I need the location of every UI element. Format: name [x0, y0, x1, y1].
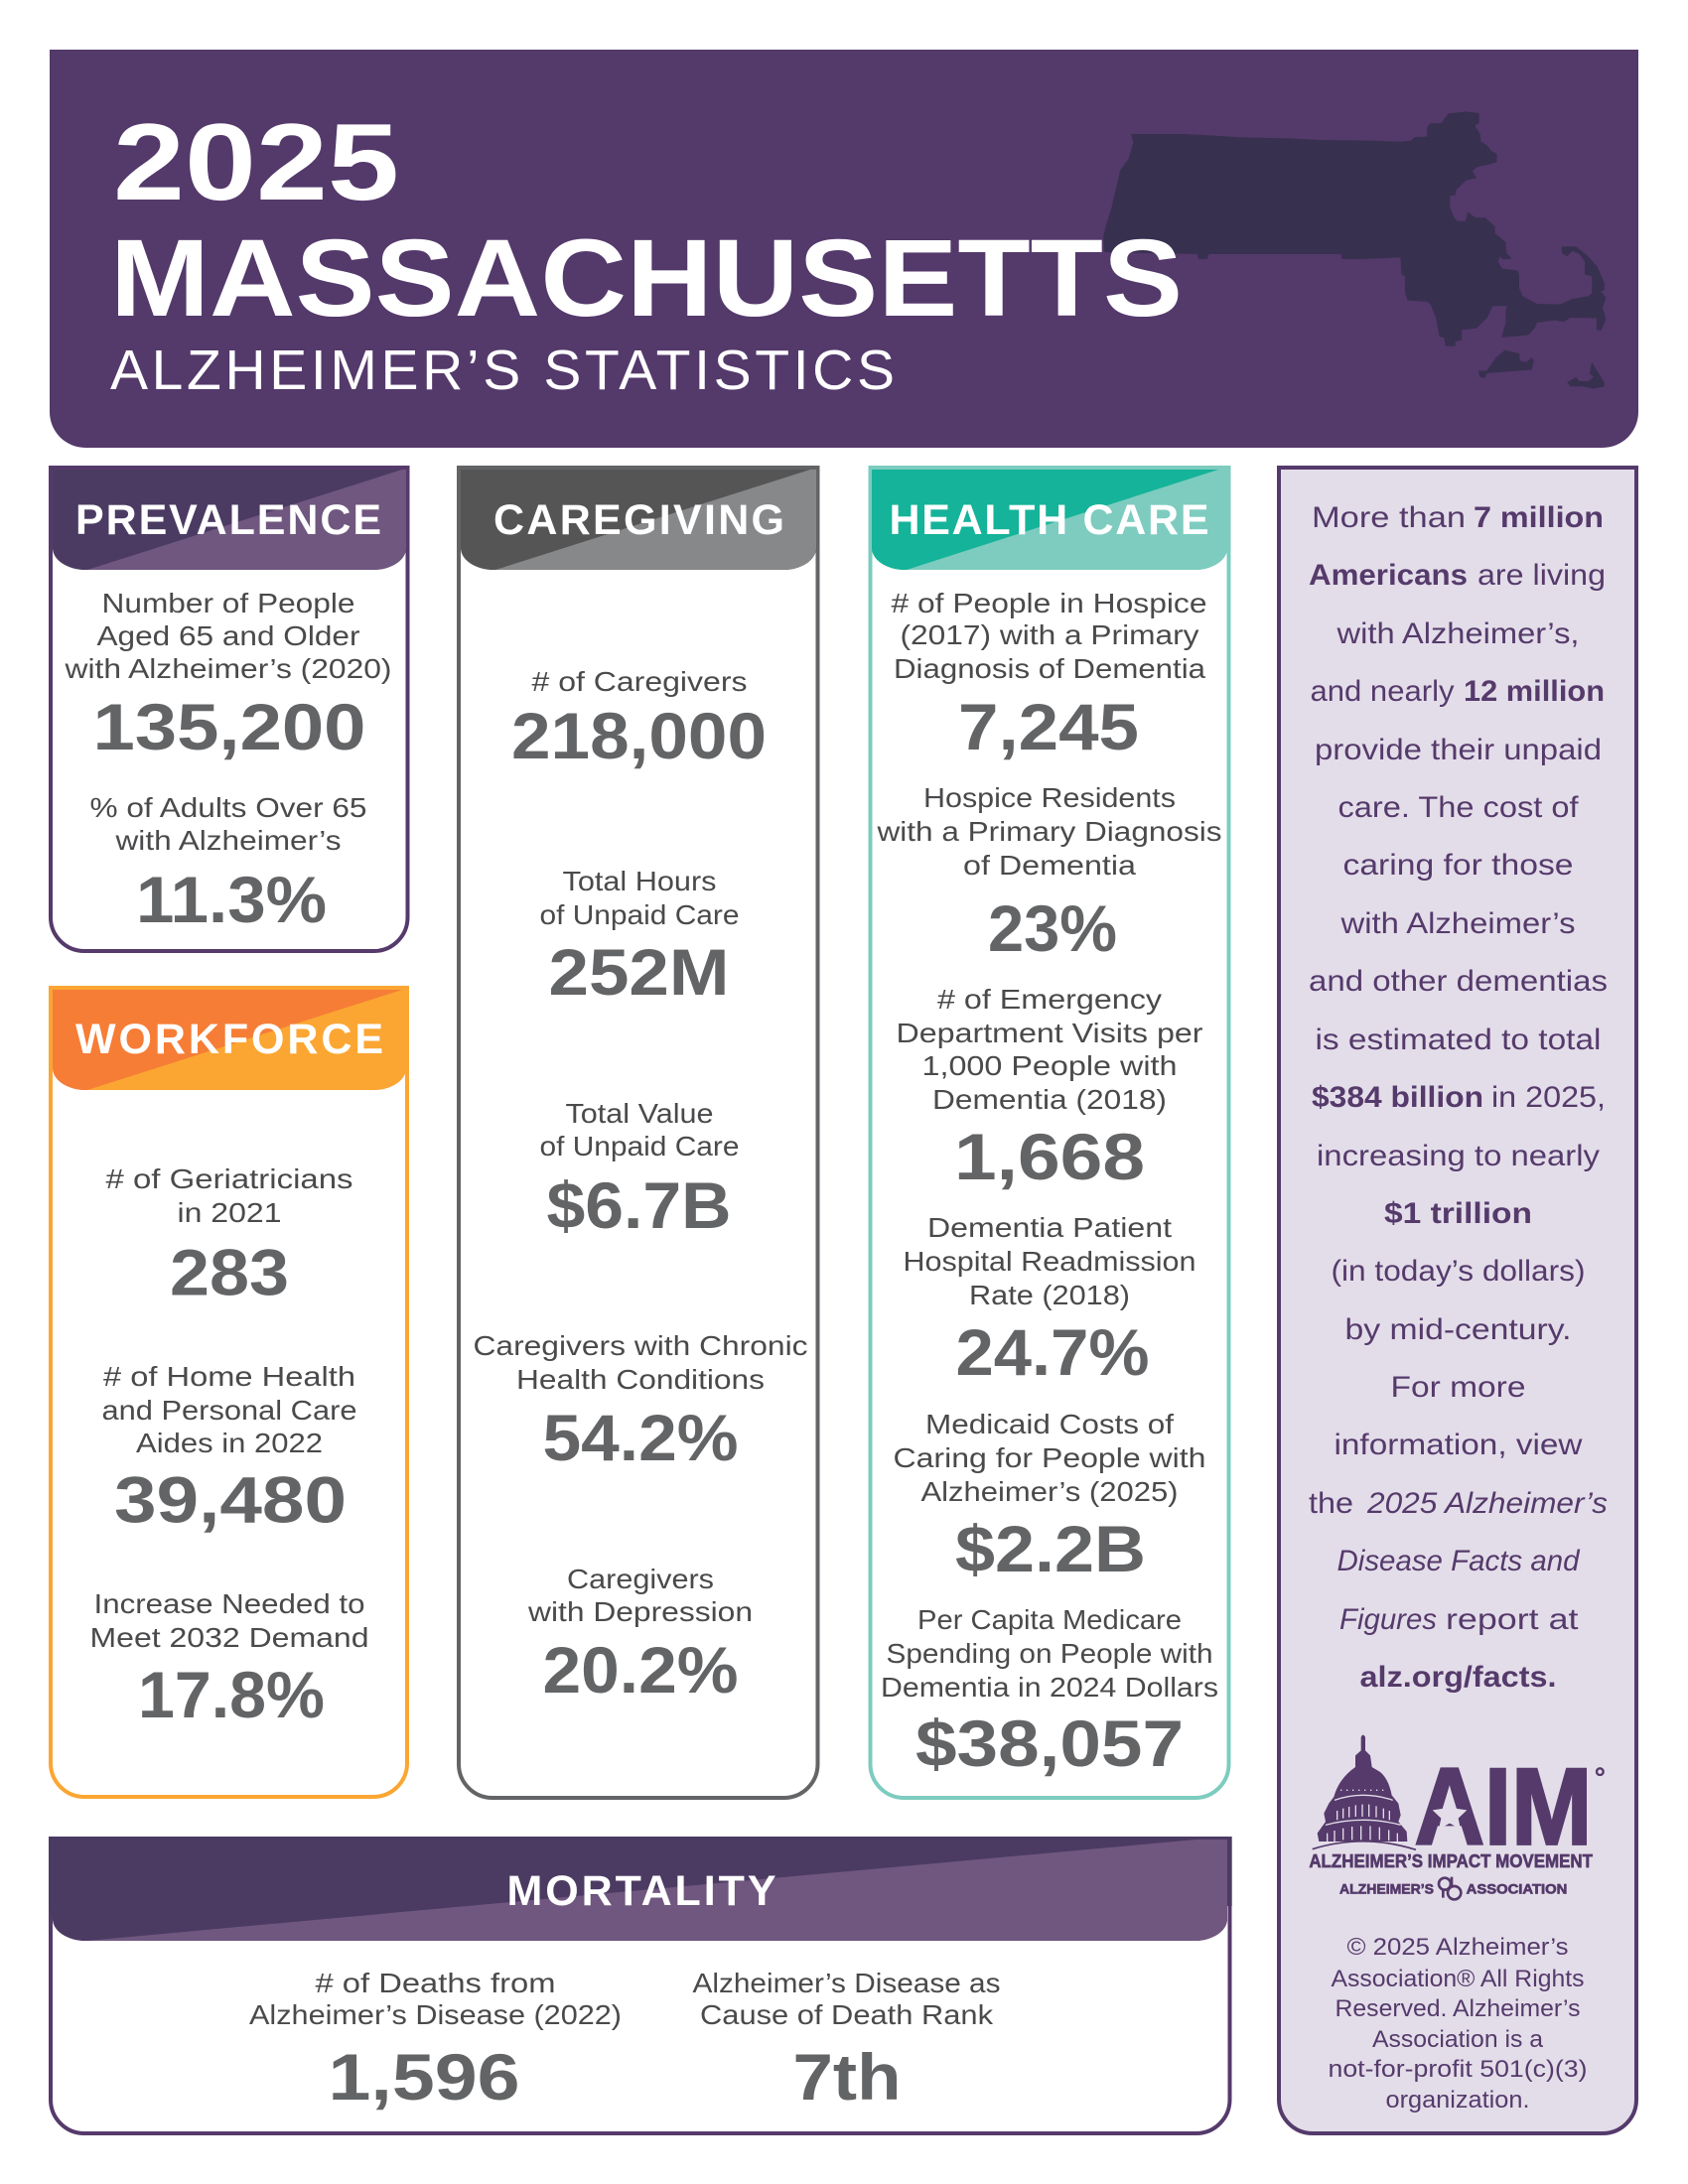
logo association: ALZHEIMER’S	[1339, 1881, 1434, 1897]
stat: hours of unpaid care: of Unpaid Care	[540, 899, 739, 930]
heading: mortality: MORTALITY	[506, 1867, 776, 1915]
stat: death rank: Cause of Death Rank	[700, 1999, 994, 2030]
stat: emergency visits	[896, 984, 1203, 1193]
stat: home health aides: 39,480	[114, 1463, 347, 1537]
sidebar paragraph: 12 million	[1464, 675, 1605, 708]
sidebar paragraph: caring for those	[1342, 849, 1573, 882]
stat: percent of adults	[89, 792, 367, 936]
stat: geriatricians: in 2021	[177, 1197, 282, 1228]
sidebar paragraph: is estimated to total	[1315, 1024, 1601, 1056]
stat: emergency visits: 1,668	[954, 1120, 1145, 1193]
sidebar paragraph: For more	[1390, 1371, 1525, 1404]
header banner	[50, 50, 1638, 448]
sidebar paragraph: information, view	[1335, 1429, 1583, 1461]
heading: caregiving: CAREGIVING	[493, 496, 784, 544]
subtitle: ALZHEIMER’S STATISTICS	[110, 339, 895, 402]
sidebar paragraph: increasing to nearly	[1317, 1140, 1600, 1172]
stat: chronic conditions: Caregivers with Chronic	[473, 1330, 808, 1361]
heading: health care: HEALTH CARE	[890, 496, 1209, 544]
stat: hospice residents	[876, 782, 1221, 965]
logo: AIM	[1309, 1735, 1604, 1899]
stat: medicaid	[894, 1409, 1205, 1585]
stat: medicaid: Medicaid Costs of	[925, 1409, 1174, 1439]
stat: value of unpaid care: Total Value	[566, 1098, 713, 1129]
sidebar paragraph: and nearly	[1311, 675, 1454, 708]
sidebar paragraph: the	[1309, 1487, 1353, 1520]
stat: value of unpaid care: of Unpaid Care	[540, 1131, 739, 1161]
logo wordmark: AIM	[1415, 1747, 1592, 1868]
panel: prevalence	[51, 468, 407, 951]
title	[110, 101, 1183, 340]
stat: people with Alzheimer's: with Alzheimer’s (2020)	[64, 653, 392, 684]
stat: home health aides: and Personal Care	[101, 1395, 357, 1426]
stat: depression	[527, 1564, 753, 1706]
stat: percent of adults: 11.3%	[136, 863, 327, 936]
sidebar paragraph: More than	[1312, 501, 1466, 534]
stat: value of unpaid care: $6.7B	[546, 1168, 731, 1242]
sidebar paragraph: $1 trillion	[1384, 1197, 1532, 1230]
stat: value of unpaid care	[540, 1098, 739, 1242]
stat: readmission: 24.7%	[955, 1315, 1150, 1389]
copyright note: Association is a	[1372, 2026, 1544, 2053]
stat: readmission: Rate (2018)	[969, 1280, 1130, 1310]
stat: caregivers: # of Caregivers	[532, 666, 747, 697]
icon: star	[1433, 1797, 1467, 1830]
stat: hospice residents: with a Primary Diagnosis	[876, 816, 1221, 847]
stat: readmission: Hospital Readmission	[904, 1246, 1196, 1277]
heading: health care	[872, 470, 1227, 570]
stat: people with Alzheimer's: 135,200	[93, 690, 365, 763]
stat: hospice residents: of Dementia	[963, 850, 1136, 881]
stat: deaths: 1,596	[328, 2040, 520, 2114]
sidebar paragraph: 7 million	[1474, 501, 1604, 534]
logo association: ASSOCIATION	[1467, 1881, 1567, 1897]
stat: hospice	[892, 588, 1207, 763]
panel: sidebar	[1279, 468, 1636, 2133]
copyright note: Association® All Rights	[1331, 1966, 1585, 1992]
stat: emergency visits: 1,000 People with	[921, 1050, 1178, 1081]
stat: depression: 20.2%	[542, 1633, 739, 1706]
title: MASSACHUSETTS	[110, 217, 1183, 340]
stat: readmission: Dementia Patient	[927, 1212, 1172, 1243]
stat: geriatricians: # of Geriatricians	[105, 1163, 353, 1194]
sidebar paragraph: care. The cost of	[1338, 791, 1579, 824]
stat: deaths	[249, 1968, 622, 2114]
copyright note: organization.	[1386, 2087, 1529, 2114]
copyright note	[1329, 1934, 1587, 2114]
stat: home health aides: Aides in 2022	[136, 1428, 323, 1458]
stat: chronic conditions: Health Conditions	[516, 1364, 765, 1395]
stat: percent of adults: % of Adults Over 65	[89, 792, 367, 823]
stat: medicaid: $2.2B	[955, 1512, 1146, 1585]
stat: medicaid: Caring for People with	[894, 1442, 1205, 1473]
stat: medicare: Per Capita Medicare	[917, 1604, 1182, 1635]
registered mark	[1597, 1768, 1604, 1775]
stat: increase needed: Meet 2032 Demand	[89, 1622, 369, 1653]
stat: people with Alzheimer's: Aged 65 and Older	[97, 620, 359, 651]
sidebar paragraph: alz.org/facts.	[1360, 1661, 1557, 1694]
copyright note: not-for-profit 501(c)(3)	[1329, 2056, 1587, 2083]
sidebar paragraph: (in today’s dollars)	[1331, 1255, 1585, 1288]
stat: hospice: # of People in Hospice	[892, 588, 1207, 618]
stat: emergency visits: # of Emergency	[937, 984, 1162, 1015]
stat: home health aides: # of Home Health	[103, 1361, 355, 1392]
stat: emergency visits: Dementia (2018)	[932, 1084, 1167, 1115]
stat: hours of unpaid care: Total Hours	[562, 866, 717, 896]
heading: mortality	[49, 1837, 1232, 1941]
stat: hospice residents: Hospice Residents	[923, 782, 1176, 813]
sidebar paragraph: provide their unpaid	[1315, 734, 1602, 766]
sidebar paragraph	[1309, 501, 1608, 1694]
panel: health care	[870, 468, 1229, 1798]
sidebar paragraph: in 2025,	[1491, 1081, 1606, 1114]
stat: medicare	[881, 1604, 1218, 1780]
heading: workforce: WORKFORCE	[75, 1016, 383, 1063]
stat: medicare: Dementia in 2024 Dollars	[881, 1672, 1218, 1703]
stat: deaths: Alzheimer’s Disease (2022)	[249, 1999, 622, 2030]
logo tagline: ALZHEIMER’S IMPACT MOVEMENT	[1309, 1850, 1594, 1871]
heading: caregiving	[461, 470, 816, 570]
stat: hospice residents: 23%	[988, 891, 1117, 965]
sidebar paragraph: Figures	[1339, 1603, 1437, 1636]
heading: prevalence	[53, 470, 406, 570]
sidebar paragraph: 2025 Alzheimer’s	[1366, 1487, 1608, 1520]
stat: increase needed	[89, 1588, 369, 1731]
stat: hours of unpaid care	[540, 866, 739, 1009]
stat: caregivers	[511, 666, 767, 772]
sidebar paragraph: and other dementias	[1309, 965, 1608, 998]
stat: medicare: $38,057	[915, 1706, 1184, 1780]
sidebar paragraph: are living	[1477, 559, 1606, 592]
stat: hospice: (2017) with a Primary	[900, 619, 1199, 650]
sidebar paragraph: Disease Facts and	[1336, 1545, 1581, 1577]
sidebar paragraph: with Alzheimer’s,	[1336, 617, 1579, 650]
stat: deaths: # of Deaths from	[316, 1968, 556, 1998]
sidebar paragraph: Americans	[1309, 559, 1468, 592]
stat: death rank: 7th	[792, 2040, 902, 2114]
stat: emergency visits: Department Visits per	[896, 1018, 1203, 1048]
stat: percent of adults: with Alzheimer’s	[114, 825, 342, 856]
stat: readmission	[904, 1212, 1196, 1389]
heading: prevalence: PREVALENCE	[75, 496, 381, 544]
stat: hospice: Diagnosis of Dementia	[894, 653, 1205, 684]
stat: caregivers: 218,000	[511, 699, 767, 772]
stat: chronic conditions: 54.2%	[542, 1401, 739, 1474]
stat: death rank: Alzheimer’s Disease as	[693, 1968, 1001, 1998]
stat: geriatricians: 283	[170, 1235, 289, 1308]
panel: workforce	[51, 988, 407, 1797]
panel: mortality	[49, 1837, 1232, 2133]
stat: hospice: 7,245	[958, 690, 1139, 763]
sidebar paragraph: with Alzheimer’s	[1339, 907, 1575, 940]
sidebar paragraph: by mid-century.	[1344, 1313, 1571, 1346]
stat: geriatricians	[105, 1163, 353, 1308]
stat: people with Alzheimer's	[64, 588, 392, 763]
stat: increase needed: 17.8%	[138, 1658, 325, 1731]
sidebar paragraph: $384 billion	[1312, 1081, 1483, 1114]
sidebar paragraph: report at	[1446, 1603, 1579, 1636]
map of Massachusetts	[1103, 111, 1606, 389]
stat: depression: Caregivers	[567, 1564, 714, 1594]
stat: people with Alzheimer's: Number of People	[101, 588, 355, 618]
stat: medicare: Spending on People with	[886, 1638, 1213, 1669]
stat: medicaid: Alzheimer’s (2025)	[921, 1476, 1178, 1507]
stat: hours of unpaid care: 252M	[548, 935, 729, 1009]
icon: capitol dome	[1313, 1735, 1416, 1849]
copyright note: Reserved. Alzheimer’s	[1335, 1995, 1581, 2022]
logo association	[1339, 1877, 1567, 1899]
copyright note: © 2025 Alzheimer’s	[1346, 1934, 1569, 1961]
stat: increase needed: Increase Needed to	[93, 1588, 365, 1619]
stat: chronic conditions	[473, 1330, 808, 1474]
title: 2025	[113, 101, 399, 223]
stat: death rank	[693, 1968, 1001, 2114]
heading: workforce	[53, 990, 406, 1090]
panel: caregiving	[459, 468, 818, 1798]
stat: depression: with Depression	[527, 1596, 753, 1627]
stat: home health aides	[101, 1361, 357, 1537]
